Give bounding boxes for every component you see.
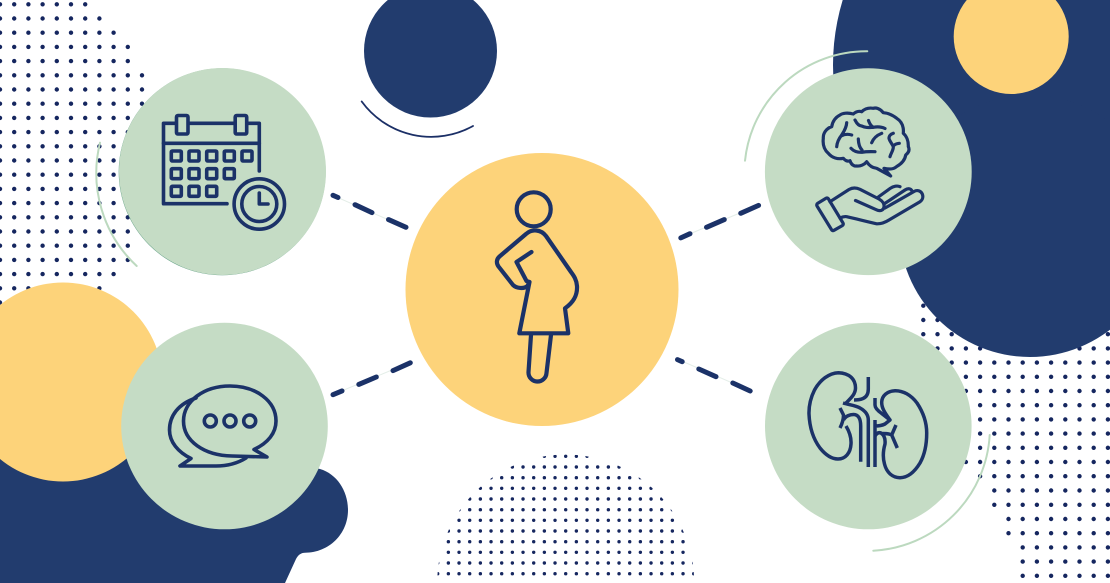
connector: calendar to centre bbox=[332, 195, 407, 228]
dot pattern: lower right bbox=[923, 306, 1110, 576]
green arc: calendar bbox=[96, 143, 137, 266]
navy circle: top centre bbox=[364, 0, 497, 118]
icon: kidneys and ureters bbox=[809, 373, 927, 478]
connector: brain to centre bbox=[680, 205, 759, 238]
central yellow circle with pregnant figure bbox=[406, 153, 678, 426]
panel: conversation bbox=[121, 323, 328, 529]
navy arc under top circle bbox=[362, 102, 473, 137]
panel: kidneys bbox=[765, 323, 972, 529]
navy blob: right bbox=[833, 0, 1110, 357]
icon: brain bbox=[823, 108, 909, 176]
icon: open hand bbox=[817, 186, 923, 231]
dot pattern: bottom centre semicircle bbox=[438, 456, 694, 574]
yellow circle: top right bbox=[954, 0, 1069, 94]
panel: brain and hand bbox=[765, 68, 972, 275]
connector: kidneys to centre bbox=[677, 359, 751, 391]
icon: speech bubbles bbox=[170, 386, 276, 466]
green arc: brain bbox=[745, 51, 867, 161]
panel: calendar bbox=[119, 68, 326, 275]
icon: calendar with clock bbox=[164, 116, 284, 229]
icon: pregnant woman bbox=[497, 192, 577, 382]
yellow circle: left bbox=[0, 282, 162, 482]
dot pattern: top left bbox=[0, 4, 142, 303]
green arc: kidneys bbox=[873, 435, 990, 551]
navy blob: bottom left bbox=[0, 440, 348, 583]
connector: chat to centre bbox=[332, 362, 411, 395]
